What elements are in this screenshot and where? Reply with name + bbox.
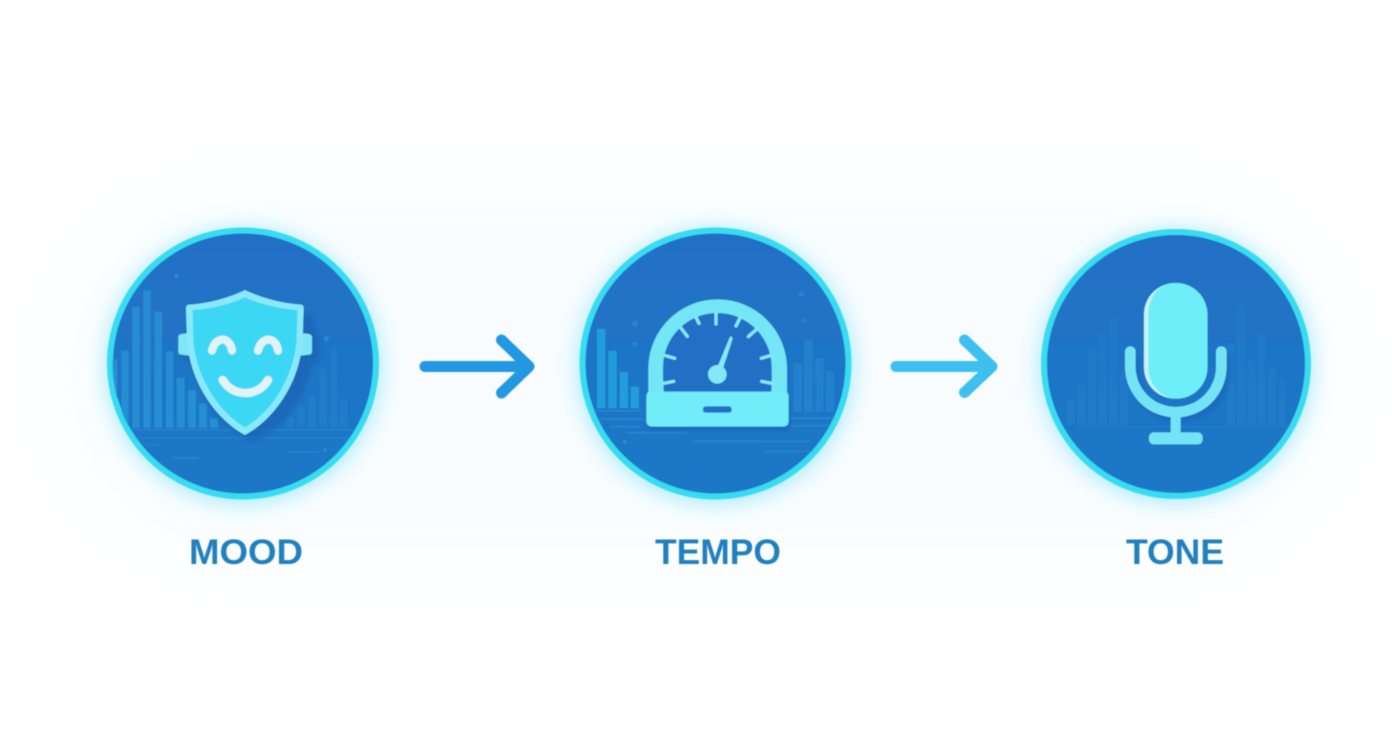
panel: tone [1039,229,1313,572]
panel: tempo [578,228,854,572]
arrow: tempo to tone [896,340,992,392]
panel: mood [105,228,381,572]
label: tempo: TEMPO [655,533,781,572]
label: mood: MOOD [189,533,303,572]
icon: speedometer [646,299,790,430]
equalizer bars: mood [111,274,357,458]
equalizer bars: tone [1067,305,1290,428]
equalizer bars: tempo [593,291,837,452]
arrow: mood to tempo [425,340,529,393]
icon: microphone [1130,283,1225,444]
icon: smiling mask shield [178,290,319,442]
label: tone: TONE [1126,533,1224,572]
background wash [60,190,1340,560]
